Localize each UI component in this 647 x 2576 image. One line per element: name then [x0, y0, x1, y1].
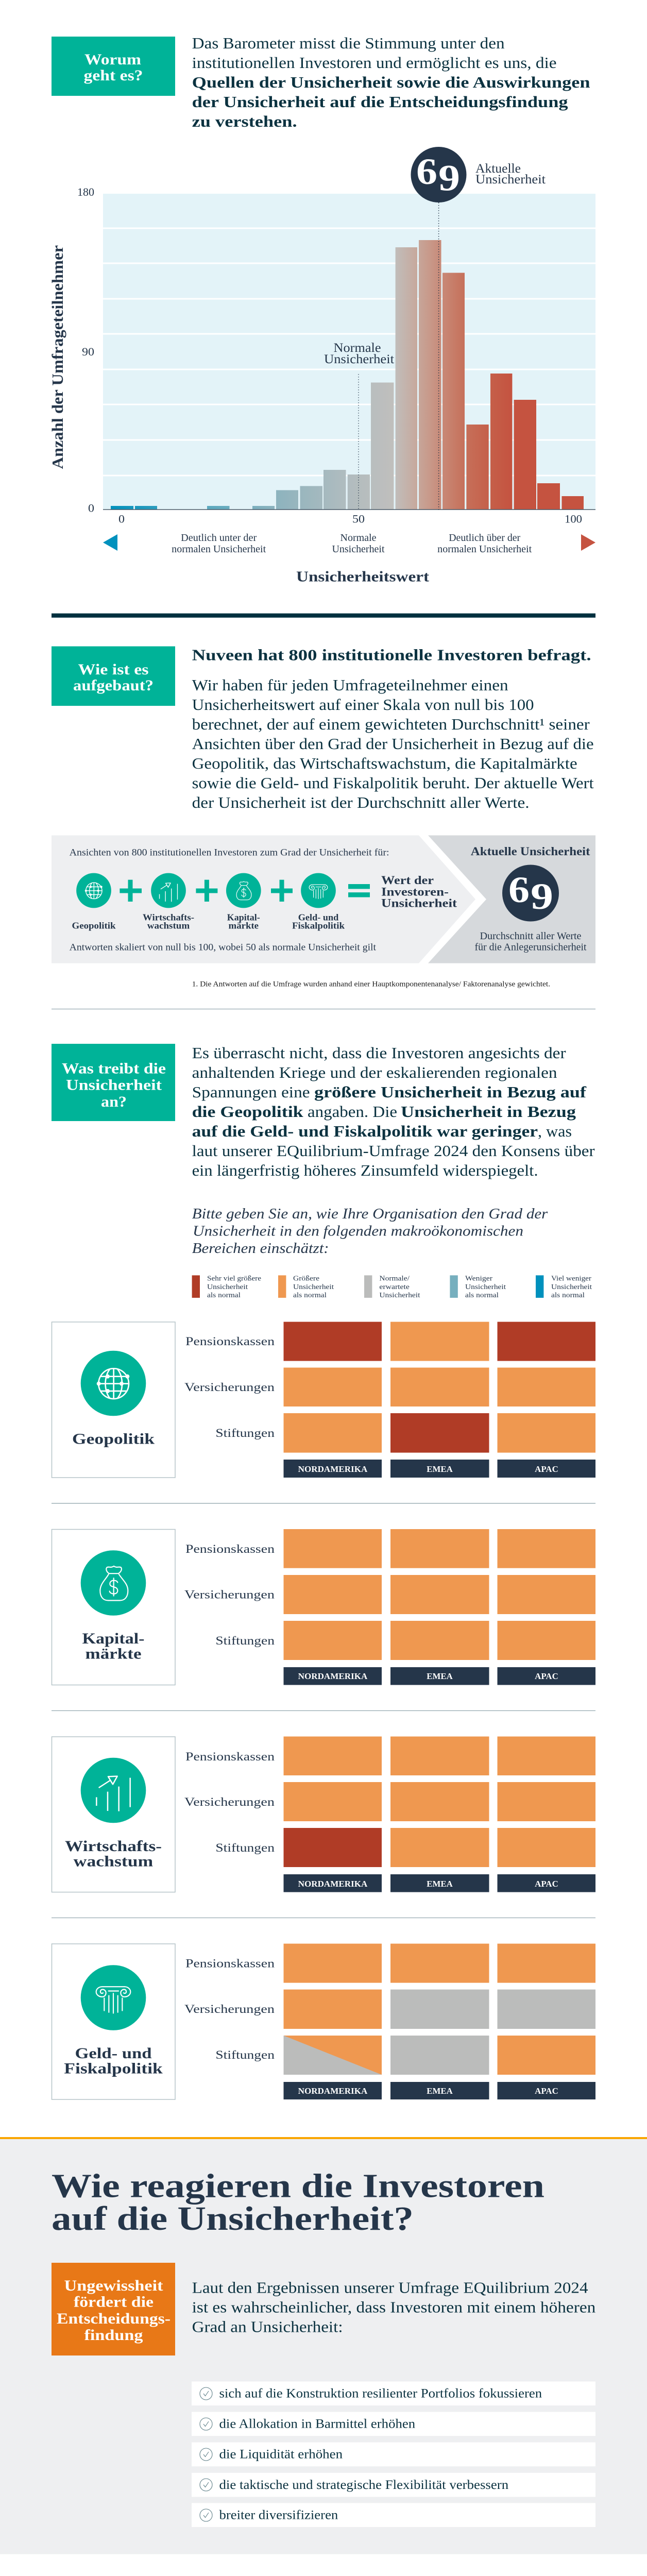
histogram bars	[111, 240, 584, 510]
region headers: NORDAMERIKA	[298, 1879, 368, 1889]
row labels: Pensionskassen	[185, 1335, 275, 1348]
drivers text: angaben. Die	[308, 1103, 397, 1121]
current uncertainty result: 6	[508, 869, 530, 910]
panel: Geopolitik	[52, 1322, 595, 1478]
normal uncertainty label: Unsicherheit	[324, 352, 394, 366]
intro text: institutionellen Investoren und ermöglicht es uns, die	[192, 54, 557, 72]
icon: plus	[271, 880, 293, 902]
intro text: Quellen der Unsicherheit sowie die Auswirkungen	[192, 73, 590, 91]
category labels: Unsicherheit	[332, 544, 385, 555]
label: Ungewissheit fördert die Entscheidungsfindung: findung	[84, 2327, 143, 2344]
drivers text: auf die Geld- und Fiskalpolitik war geringer	[192, 1122, 538, 1140]
legend: Sehr viel größere	[207, 1275, 261, 1283]
x axis ticks: 0	[118, 513, 125, 526]
region headers: APAC	[535, 1464, 558, 1474]
survey question: Unsicherheit in den folgenden makroökonomischen	[193, 1224, 523, 1240]
region headers: APAC	[535, 1879, 558, 1889]
heading: Wirtschaftswachstum: Wirtschafts-	[65, 1838, 162, 1855]
checklist: die taktische und strategische Flexibilität verbessern	[219, 2478, 509, 2492]
heading: Geld- und Fiskalpolitik: Geld- und	[75, 2045, 152, 2062]
panel: score formula: Antworten skaliert von null bis 100, wobei 50 als normale Unsicherheit gilt	[70, 942, 377, 953]
label: Was treibt die Unsicherheit an?	[52, 1044, 175, 1121]
icon: growth chart	[151, 873, 186, 908]
panel: investor reaction	[0, 2137, 647, 2554]
category labels	[172, 532, 532, 555]
row labels: Pensionskassen	[185, 1543, 275, 1556]
drivers text: , was	[538, 1122, 572, 1140]
histogram chart	[48, 147, 595, 585]
legend: erwartete	[379, 1283, 410, 1291]
heading: Kapitalmärkte: märkte	[86, 1646, 141, 1663]
panel: Geld- und Fiskalpolitik	[52, 1944, 595, 2099]
formula labels: märkte	[229, 921, 259, 931]
row labels: Versicherungen	[184, 1381, 275, 1394]
formula labels: wachstum	[147, 921, 190, 931]
current uncertainty result	[471, 845, 590, 953]
legend: Größere	[293, 1275, 319, 1283]
title: auf die Unsicherheit?	[52, 2200, 414, 2238]
region headers	[283, 1460, 595, 1478]
panel: Wirtschaftswachstum	[52, 1736, 595, 1892]
legend: Weniger	[465, 1275, 492, 1283]
region headers: APAC	[535, 1671, 558, 1681]
region headers	[283, 2082, 595, 2099]
legend: als normal	[207, 1292, 241, 1299]
legend: Unsicherheit	[293, 1283, 334, 1291]
formula labels: Kapital-	[227, 912, 260, 923]
formula result text: Wert der	[381, 874, 434, 887]
y axis labels: 0	[88, 502, 94, 514]
x axis ticks: 50	[352, 513, 365, 526]
icon: plus	[196, 880, 217, 902]
normal uncertainty label: Normale	[334, 341, 381, 355]
y axis title: Anzahl der Umfrageteilnehmer	[48, 245, 66, 469]
title: Wie reagieren die Investoren	[52, 2167, 544, 2205]
heading: Wirtschaftswachstum: wachstum	[74, 1853, 153, 1870]
label: Worum geht es?: geht es?	[83, 67, 143, 84]
label: Worum geht es?: Worum	[84, 51, 141, 68]
region headers: NORDAMERIKA	[298, 1464, 368, 1474]
method text: Geopolitik, das Wirtschaftswachstum, die Kapitalmärkte	[192, 754, 577, 772]
category labels: Deutlich über der	[449, 532, 521, 544]
method heading: Nuveen hat 800 institutionelle Investoren befragt.	[192, 646, 591, 664]
heading: Wirtschaftswachstum	[65, 1838, 162, 1870]
formula result text	[381, 874, 457, 910]
drivers text: die Geopolitik	[192, 1103, 303, 1121]
current uncertainty result: 9	[531, 876, 553, 917]
row labels	[184, 1957, 275, 2062]
reaction text: ist es wahrscheinlicher, dass Investoren mit einem höheren	[192, 2298, 596, 2316]
row labels: Versicherungen	[184, 1588, 275, 1602]
legend: Unsicherheit	[551, 1283, 592, 1291]
checklist: die Allokation in Barmittel erhöhen	[219, 2417, 416, 2431]
checklist: die Liquidität erhöhen	[219, 2448, 343, 2462]
method text: Unsicherheitswert auf einer Skala von null bis 100	[192, 696, 534, 714]
legend: Unsicherheit	[465, 1283, 506, 1291]
label: Wie ist es aufgebaut?: Wie ist es	[78, 661, 148, 678]
heading: Geld- und Fiskalpolitik	[64, 2045, 163, 2077]
checklist	[192, 2381, 595, 2527]
region headers: EMEA	[427, 1464, 453, 1474]
arrow: left	[103, 534, 117, 551]
row labels	[184, 1543, 275, 1648]
region headers: NORDAMERIKA	[298, 1671, 368, 1681]
y axis labels	[77, 185, 94, 514]
x axis title: Unsicherheitswert	[296, 569, 430, 585]
label: Was treibt die Unsicherheit an?: an?	[101, 1093, 127, 1110]
formula labels: Fiskalpolitik	[292, 921, 345, 931]
method text	[192, 676, 594, 811]
label: Ungewissheit fördert die Entscheidungsfindung: Ungewissheit	[64, 2277, 163, 2294]
heatmap	[283, 1529, 595, 1660]
heatmap	[283, 1944, 595, 2075]
x axis ticks: 100	[565, 513, 582, 526]
icon: equals	[348, 887, 370, 895]
current uncertainty marker: Aktuelle	[475, 162, 521, 176]
current uncertainty marker	[411, 147, 546, 202]
row labels: Pensionskassen	[185, 1957, 275, 1970]
row labels	[184, 1750, 275, 1855]
legend: Normale/	[379, 1275, 410, 1283]
intro text: zu verstehen.	[192, 112, 297, 130]
reaction text: Grad an Unsicherheit:	[192, 2317, 343, 2336]
formula labels: Wirtschafts-	[143, 912, 194, 923]
x axis ticks	[118, 513, 582, 526]
heading: Kapitalmärkte: Kapital-	[82, 1630, 144, 1647]
heatmap	[283, 1322, 595, 1453]
current uncertainty marker: 9	[438, 158, 460, 199]
current uncertainty result: Aktuelle Unsicherheit	[471, 845, 590, 858]
drivers text	[192, 1044, 595, 1179]
footnote: 1. Die Antworten auf die Umfrage wurden anhand einer Hauptkomponentenanalyse/ Faktorenanalyse gewichtet.	[192, 980, 550, 989]
method text: berechnet, der auf einem gewichteten Durchschnitt¹ seiner	[192, 715, 590, 733]
region headers: APAC	[535, 2086, 558, 2096]
heading: Geopolitik: Geopolitik	[72, 1431, 155, 1448]
category labels: normalen Unsicherheit	[172, 544, 266, 555]
icon: money bag	[226, 873, 261, 908]
legend: als normal	[551, 1292, 585, 1299]
legend: Unsicherheit	[379, 1292, 420, 1299]
icon: money bag	[81, 1550, 146, 1616]
drivers text: anhaltenden Kriege und der eskalierenden regionalen	[192, 1063, 557, 1081]
panel: score formula: Ansichten von 800 institutionellen Investoren zum Grad der Unsicherheit für:	[70, 848, 389, 858]
row labels: Versicherungen	[184, 1795, 275, 1809]
survey question	[192, 1206, 548, 1257]
region headers: EMEA	[427, 2086, 453, 2096]
current uncertainty marker: 6	[416, 151, 437, 192]
heading: Kapitalmärkte	[82, 1630, 144, 1663]
formula labels: Geopolitik	[72, 921, 116, 931]
label: Wie ist es aufgebaut?	[52, 646, 175, 706]
intro text: der Unsicherheit auf die Entscheidungsfindung	[192, 93, 568, 111]
current uncertainty result: für die Anlegerunsicherheit	[475, 942, 587, 953]
survey question: Bereichen einschätzt:	[192, 1241, 329, 1257]
heatmap	[283, 1736, 595, 1867]
icon: globe	[76, 873, 111, 908]
reaction text	[192, 2279, 596, 2336]
row labels: Stiftungen	[215, 1841, 275, 1855]
icon: globe	[81, 1351, 146, 1416]
region headers: EMEA	[427, 1879, 453, 1889]
category labels: normalen Unsicherheit	[437, 544, 532, 555]
title	[52, 2167, 544, 2238]
method text: Wir haben für jeden Umfrageteilnehmer einen	[192, 676, 508, 694]
region headers	[283, 1874, 595, 1892]
region headers: EMEA	[427, 1671, 453, 1681]
survey question: Bitte geben Sie an, wie Ihre Organisation den Grad der	[192, 1206, 548, 1222]
label: Ungewissheit fördert die Entscheidungsfindung	[52, 2263, 175, 2355]
category labels: Normale	[340, 532, 377, 544]
legend: als normal	[465, 1292, 499, 1299]
legend	[192, 1275, 592, 1299]
formula result text: Investoren-	[381, 885, 449, 899]
drivers text: größere Unsicherheit in Bezug auf	[314, 1083, 587, 1101]
label: Ungewissheit fördert die Entscheidungsfindung: fördert die	[74, 2294, 154, 2311]
current uncertainty marker: Unsicherheit	[475, 173, 546, 187]
checklist: breiter diversifizieren	[219, 2508, 338, 2522]
row labels: Stiftungen	[215, 1634, 275, 1648]
label: Ungewissheit fördert die Entscheidungsfindung: Entscheidungs-	[57, 2310, 171, 2327]
intro text: Das Barometer misst die Stimmung unter den	[192, 34, 505, 52]
legend: als normal	[293, 1292, 327, 1299]
legend: Unsicherheit	[207, 1283, 248, 1291]
heading: Geld- und Fiskalpolitik: Fiskalpolitik	[64, 2060, 163, 2077]
icon: column	[301, 873, 336, 908]
label: Worum geht es?	[52, 37, 175, 96]
row labels: Pensionskassen	[185, 1750, 275, 1764]
intro text	[192, 34, 590, 130]
method text: sowie die Geld- und Fiskalpolitik beruht. Der aktuelle Wert	[192, 774, 594, 792]
current uncertainty result: Durchschnitt aller Werte	[480, 930, 582, 942]
drivers text: laut unserer EQuilibrium-Umfrage 2024 den Konsens über	[192, 1142, 595, 1160]
region headers: NORDAMERIKA	[298, 2086, 368, 2096]
normal uncertainty label	[324, 341, 394, 366]
arrow: right	[581, 534, 595, 551]
row labels: Stiftungen	[215, 1427, 275, 1440]
method text: der Unsicherheit ist der Durchschnitt aller Werte.	[192, 793, 530, 811]
label: Was treibt die Unsicherheit an?: Unsicherheit	[66, 1077, 162, 1094]
row labels: Versicherungen	[184, 2003, 275, 2016]
label: Was treibt die Unsicherheit an?: Was treibt die	[62, 1060, 166, 1077]
drivers text: Unsicherheit in Bezug	[401, 1103, 576, 1121]
drivers text: Spannungen eine	[192, 1083, 310, 1101]
checklist: sich auf die Konstruktion resilienter Portfolios fokussieren	[219, 2386, 542, 2400]
y axis labels: 180	[77, 185, 94, 198]
formula labels: Geld- und	[298, 912, 339, 923]
legend: Viel weniger	[551, 1275, 591, 1283]
reaction text: Laut den Ergebnissen unserer Umfrage EQuilibrium 2024	[192, 2279, 588, 2297]
formula labels	[72, 912, 345, 931]
label: Wie ist es aufgebaut?: aufgebaut?	[73, 677, 154, 694]
icon: growth chart	[81, 1758, 146, 1823]
icon: column	[81, 1965, 146, 2030]
row labels: Stiftungen	[215, 2048, 275, 2062]
category labels: Deutlich unter der	[181, 532, 257, 544]
icon: plus	[120, 880, 142, 902]
region headers	[283, 1667, 595, 1685]
panel: Kapitalmärkte	[52, 1529, 595, 1685]
method text: Ansichten über den Grad der Unsicherheit in Bezug auf die	[192, 735, 594, 753]
drivers text: Es überrascht nicht, dass die Investoren angesichts der	[192, 1044, 566, 1062]
formula result text: Unsicherheit	[381, 897, 457, 910]
drivers text: ein längerfristig höheres Zinsumfeld widerspiegelt.	[192, 1161, 538, 1179]
panel: score formula	[52, 835, 595, 963]
row labels	[184, 1335, 275, 1440]
y axis labels: 90	[82, 345, 94, 358]
